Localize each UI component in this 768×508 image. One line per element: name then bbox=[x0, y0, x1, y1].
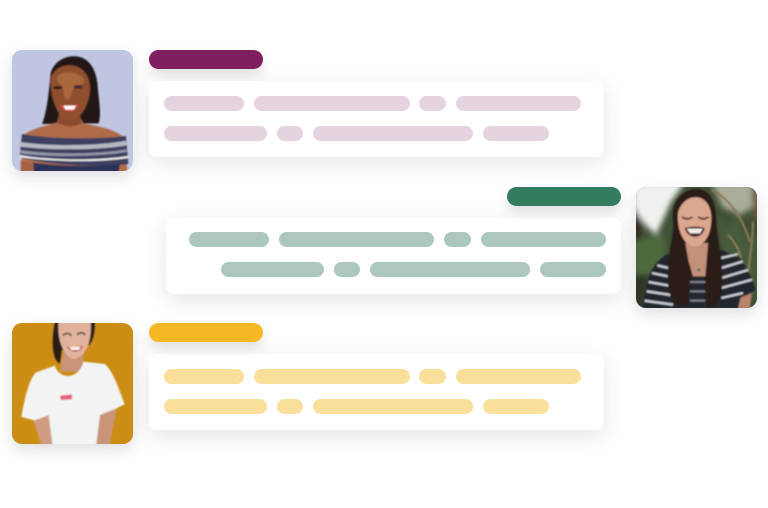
message group: green bbox=[161, 187, 762, 319]
message group: yellow bbox=[7, 323, 609, 455]
message card: green bbox=[166, 218, 621, 294]
name pill: green bbox=[507, 187, 621, 206]
name pill: yellow bbox=[149, 323, 263, 342]
message card: yellow bbox=[149, 354, 604, 430]
name pill: purple bbox=[149, 50, 263, 69]
message group: purple bbox=[7, 50, 609, 182]
avatar: woman with striped off-shoulder top on lavender background bbox=[12, 50, 133, 171]
avatar: laughing woman with striped shirt among plants bbox=[636, 187, 757, 308]
avatar: smiling woman in white t-shirt on amber background bbox=[12, 323, 133, 444]
message card: purple bbox=[149, 81, 604, 156]
